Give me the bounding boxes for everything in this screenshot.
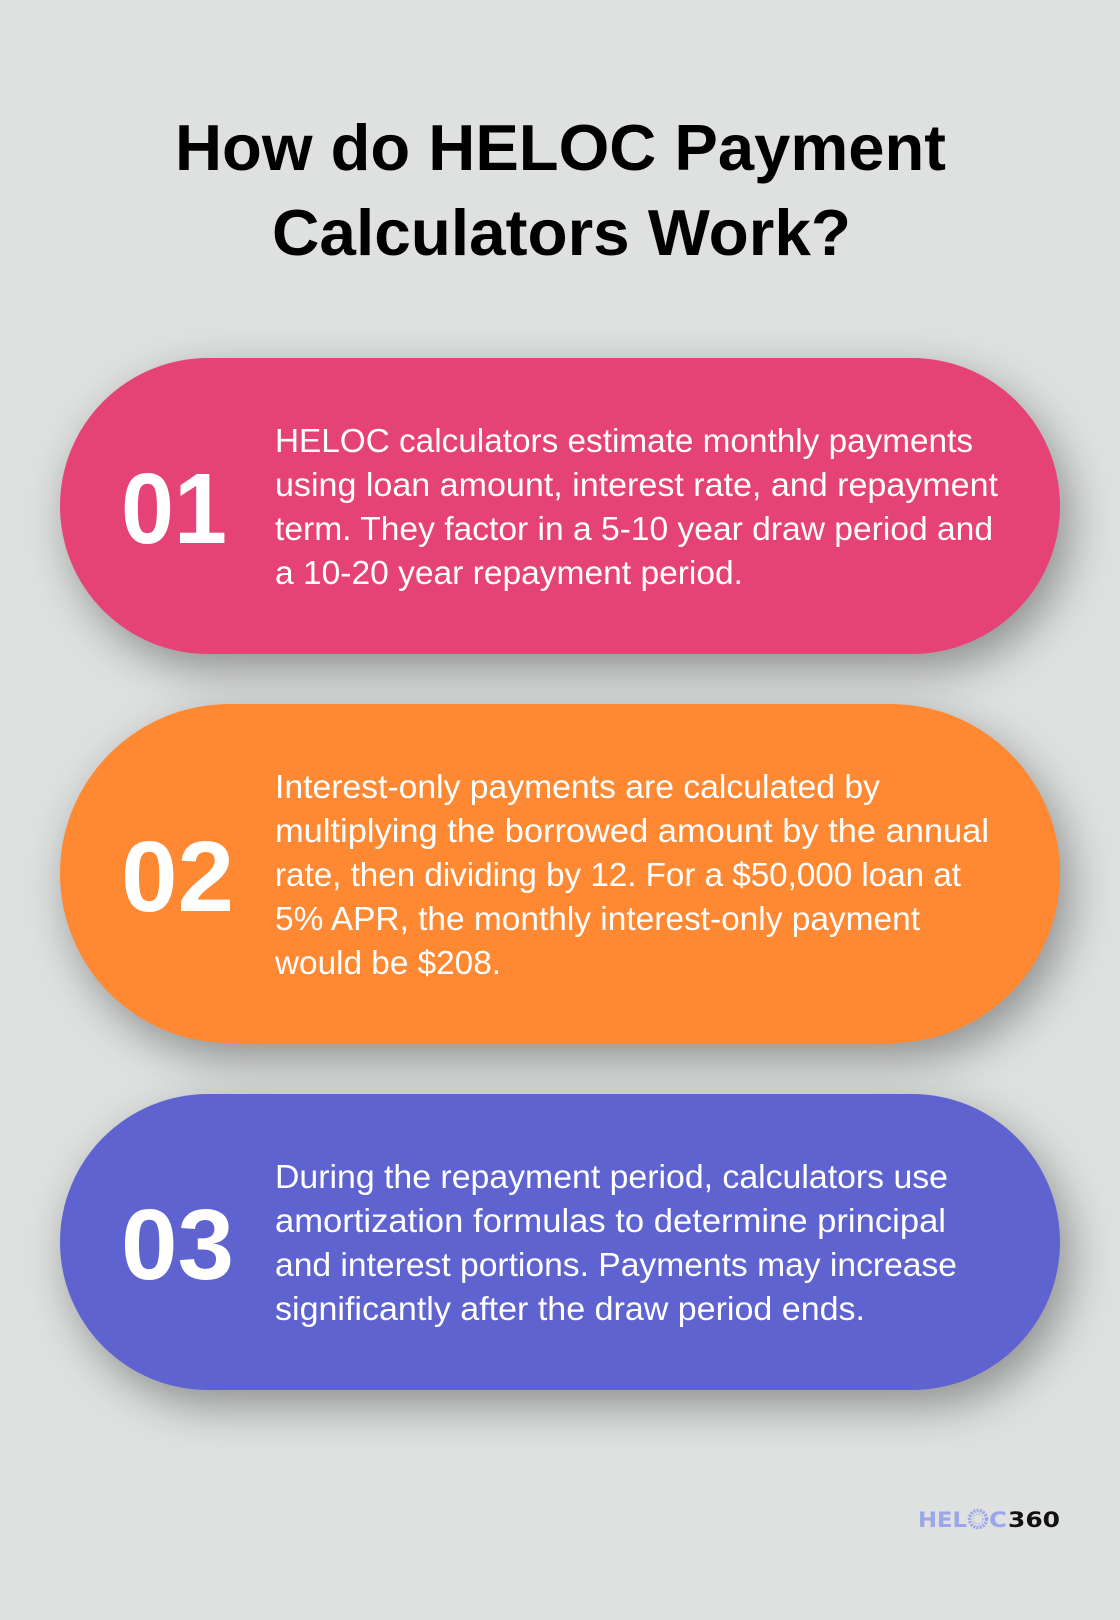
text block: step 01 description	[275, 422, 998, 591]
text block: step 02 description: would be $208.	[274, 944, 501, 981]
text block: step 02 description: rate, then dividing by 12. For a $50,000 loan at	[275, 856, 961, 893]
text block: step 03 description	[275, 1158, 957, 1327]
text block: step 02 description: multiplying the borrowed amount by the annual	[275, 812, 989, 849]
number 03: 03	[121, 1189, 234, 1301]
panel: step 01	[60, 358, 1060, 654]
text block: step 01 description: a 10-20 year repayment period.	[275, 554, 743, 591]
text block: step 01 description: using loan amount, interest rate, and repayment	[275, 466, 998, 503]
number 01: 01	[121, 453, 227, 565]
panel: step 02	[60, 704, 1060, 1043]
text block: step 03 description: and interest portions. Payments may increase	[275, 1246, 957, 1283]
text block: step 01 description: term. They factor in a 5-10 year draw period and	[275, 510, 993, 547]
icon: swirl O	[970, 1510, 986, 1528]
title	[175, 111, 946, 269]
text block: step 02 description: Interest-only payments are calculated by	[275, 768, 880, 805]
logo: HELOC360: C	[989, 1508, 1007, 1532]
title: Calculators Work?	[272, 196, 851, 269]
text block: step 01 description: HELOC calculators estimate monthly payments	[275, 422, 973, 459]
logo: HELOC360: HEL	[918, 1508, 967, 1532]
logo: HELOC360: 360	[1008, 1508, 1060, 1532]
logo: HELOC360	[918, 1508, 1060, 1532]
text block: step 02 description	[274, 768, 989, 981]
text block: step 03 description: significantly after the draw period ends.	[275, 1290, 865, 1327]
text block: step 02 description: 5% APR, the monthly interest-only payment	[275, 900, 920, 937]
number 02: 02	[121, 821, 234, 933]
text block: step 03 description: amortization formulas to determine principal	[275, 1202, 946, 1239]
text block: step 03 description: During the repayment period, calculators use	[275, 1158, 948, 1195]
panel: step 03	[60, 1094, 1060, 1390]
title: How do HELOC Payment	[175, 111, 946, 184]
